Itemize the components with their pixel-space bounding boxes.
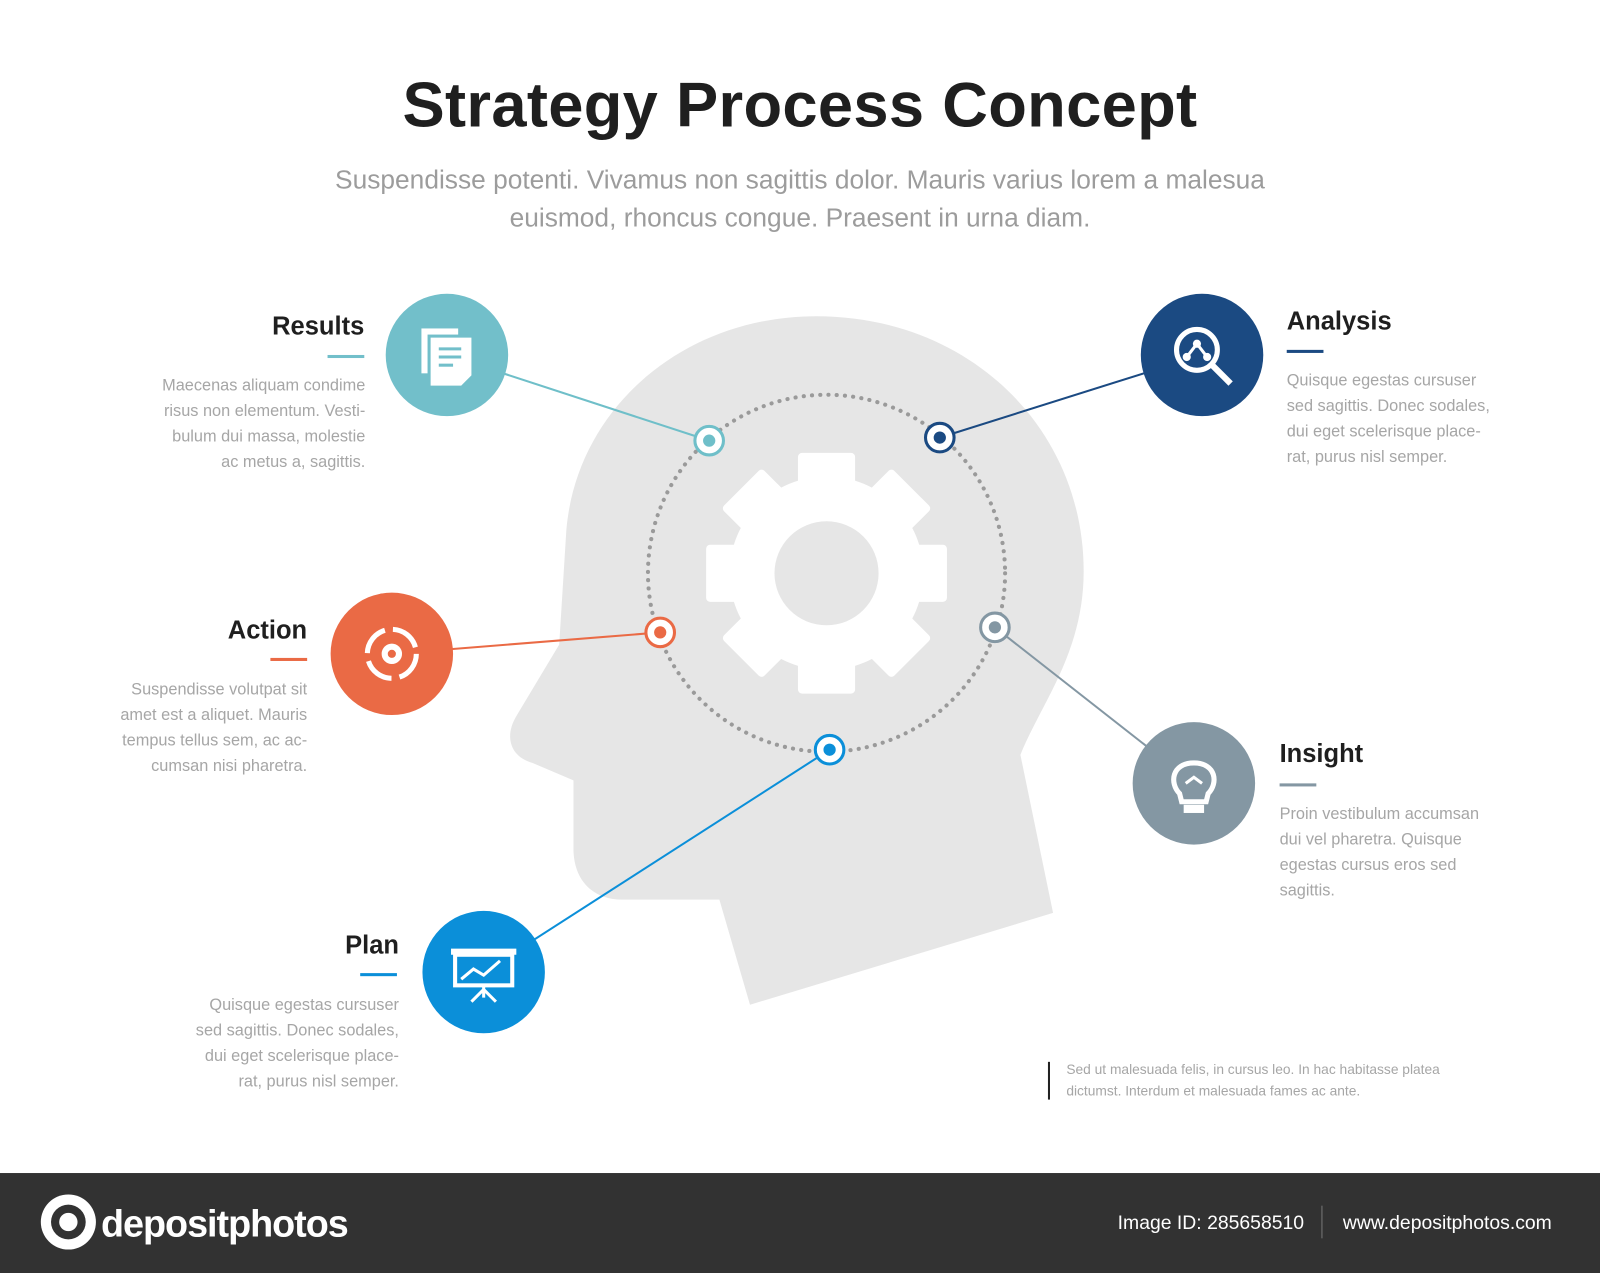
text: analysis: Quisque egestas cursuser	[1287, 372, 1477, 390]
text: plan: dui eget scelerisque place-	[205, 1047, 399, 1065]
ring nodes	[646, 423, 1009, 764]
footer bar: Image ID: 285658510	[1118, 1212, 1304, 1234]
text: action: Action	[228, 617, 307, 645]
text: action	[120, 617, 308, 775]
text: results: risus non elementum. Vesti-	[164, 402, 365, 420]
footnote	[1048, 1062, 1440, 1100]
icon circle: insight	[1133, 722, 1255, 845]
text: plan: sed sagittis. Donec sodales,	[196, 1021, 399, 1039]
text: insight: dui vel pharetra. Quisque	[1280, 831, 1462, 849]
icon circle: plan	[422, 911, 545, 1033]
text: analysis: rat, purus nisl semper.	[1287, 448, 1447, 466]
text: analysis: Analysis	[1287, 307, 1392, 335]
text: results: bulum dui massa, molestie	[172, 428, 365, 446]
text: analysis: sed sagittis. Donec sodales,	[1287, 397, 1490, 415]
text: results: Maecenas aliquam condime	[162, 377, 365, 395]
gear	[706, 453, 947, 694]
text: plan: Plan	[345, 932, 399, 960]
subtitle: euismod, rhoncus congue. Praesent in urna diam.	[510, 202, 1090, 232]
text: results: Results	[272, 313, 364, 341]
text: action: cumsan nisi pharetra.	[151, 757, 307, 775]
icon circle: results	[386, 294, 508, 416]
text: action: amet est a aliquet. Mauris	[120, 706, 307, 724]
text: action: Suspendisse volutpat sit	[131, 681, 308, 699]
title: Strategy Process Concept	[403, 70, 1197, 140]
text: insight: egestas cursus eros sed	[1280, 856, 1456, 874]
footer bar: www.depositphotos.com	[1342, 1212, 1552, 1234]
subtitle: Suspendisse potenti. Vivamus non sagittis dolor. Mauris varius lorem a malesua	[335, 165, 1265, 195]
text: insight: Proin vestibulum accumsan	[1280, 805, 1479, 823]
text: plan	[196, 932, 400, 1090]
text: action: tempus tellus sem, ac ac-	[122, 732, 307, 750]
text: results	[162, 313, 365, 471]
text: analysis: dui eget scelerisque place-	[1287, 423, 1481, 441]
dotted ring	[648, 395, 1005, 752]
icon circle: action	[331, 593, 453, 715]
text: insight: Insight	[1280, 740, 1364, 768]
footer bar	[0, 1173, 1600, 1273]
footnote: dictumst. Interdum et malesuada fames ac ante.	[1066, 1084, 1360, 1099]
connector lines	[392, 355, 1202, 972]
icon circle: analysis	[1141, 294, 1263, 416]
footnote: Sed ut malesuada felis, in cursus leo. In hac habitasse platea	[1066, 1062, 1440, 1077]
text: plan: Quisque egestas cursuser	[209, 996, 400, 1014]
text: insight	[1280, 740, 1479, 900]
footer bar: depositphotos	[101, 1202, 348, 1244]
text: plan: rat, purus nisl semper.	[238, 1072, 399, 1090]
text: results: ac metus a, sagittis.	[221, 453, 365, 471]
text: analysis	[1287, 307, 1490, 466]
head silhouette	[510, 316, 1084, 1005]
subtitle	[335, 165, 1265, 232]
text: insight: sagittis.	[1280, 882, 1335, 900]
